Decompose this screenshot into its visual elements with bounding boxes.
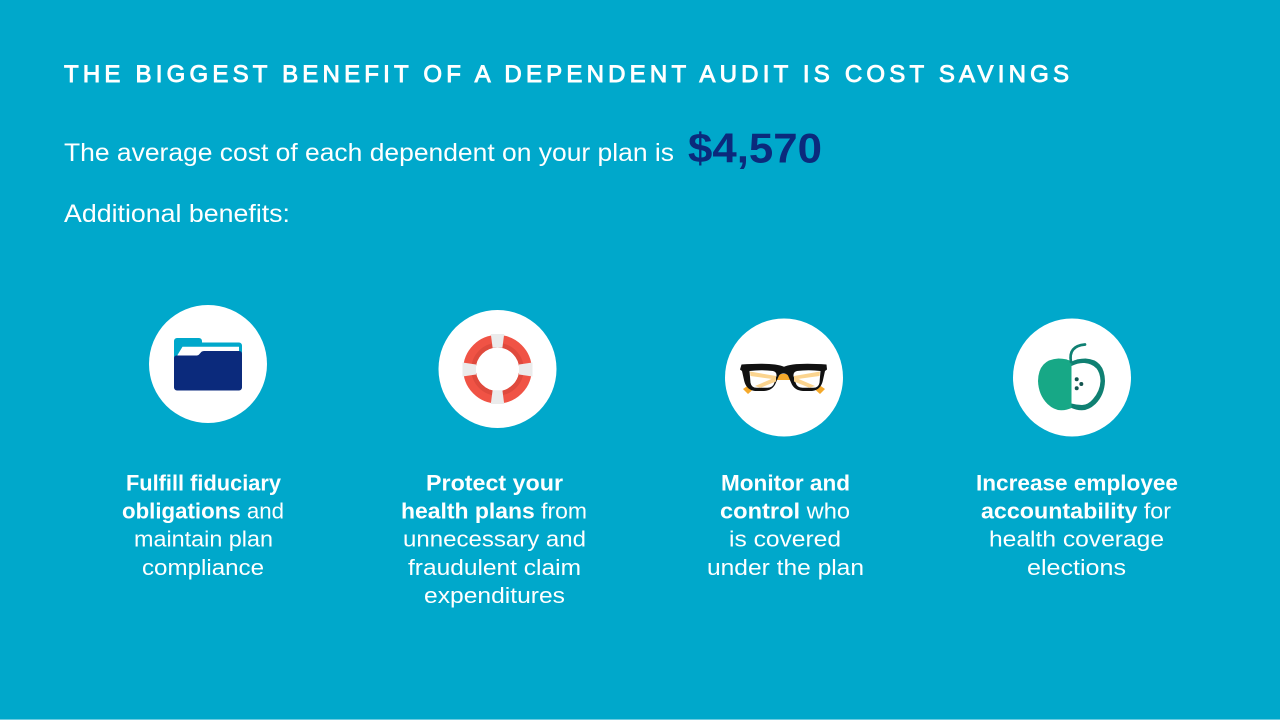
benefit 3: monitor and control	[707, 318, 864, 580]
benefit 1 text	[122, 470, 284, 580]
benefit 2 text: fraudulent claim	[408, 555, 581, 580]
benefit 1 text: obligations and	[122, 498, 284, 524]
additional benefits heading: Additional benefits:	[64, 200, 290, 228]
icon: folder	[149, 305, 267, 423]
benefit 3 text: is covered	[729, 526, 841, 552]
benefit 4 text: elections	[1027, 555, 1126, 580]
icon: glasses	[725, 318, 843, 436]
benefit 3 text: under the plan	[707, 555, 864, 580]
benefit 1 text: Fulfill fiduciary	[126, 470, 282, 496]
benefit 4: employee accountability	[976, 318, 1178, 580]
icon: life preserver	[438, 310, 556, 428]
average cost statement	[64, 124, 822, 172]
icon: apple	[1013, 318, 1131, 436]
benefit 4 text: Increase employee	[976, 470, 1178, 496]
benefit 2: protect health plans	[401, 310, 587, 608]
title: THE BIGGEST BENEFIT OF A DEPENDENT AUDIT IS COST SAVINGS	[64, 61, 1069, 88]
cost figure: $4,570	[688, 124, 822, 172]
benefit 1: fiduciary obligations	[122, 305, 284, 580]
benefit 3 text: control who	[720, 498, 850, 524]
benefit 2 text: expenditures	[424, 583, 565, 608]
benefit 2 text: health plans from	[401, 498, 587, 524]
benefit 1 text: compliance	[142, 555, 264, 580]
benefit 4 text	[976, 470, 1178, 580]
benefit 2 text: Protect your	[426, 470, 563, 496]
benefit 1 text: maintain plan	[134, 526, 273, 552]
benefit 3 text	[707, 470, 864, 580]
benefit 4 text: accountability for	[981, 498, 1171, 524]
average cost statement: The average cost of each dependent on your plan is	[64, 139, 674, 167]
benefit 2 text	[401, 470, 587, 608]
benefit 4 text: health coverage	[989, 526, 1164, 552]
benefit 2 text: unnecessary and	[403, 526, 586, 552]
benefit 3 text: Monitor and	[721, 470, 850, 496]
